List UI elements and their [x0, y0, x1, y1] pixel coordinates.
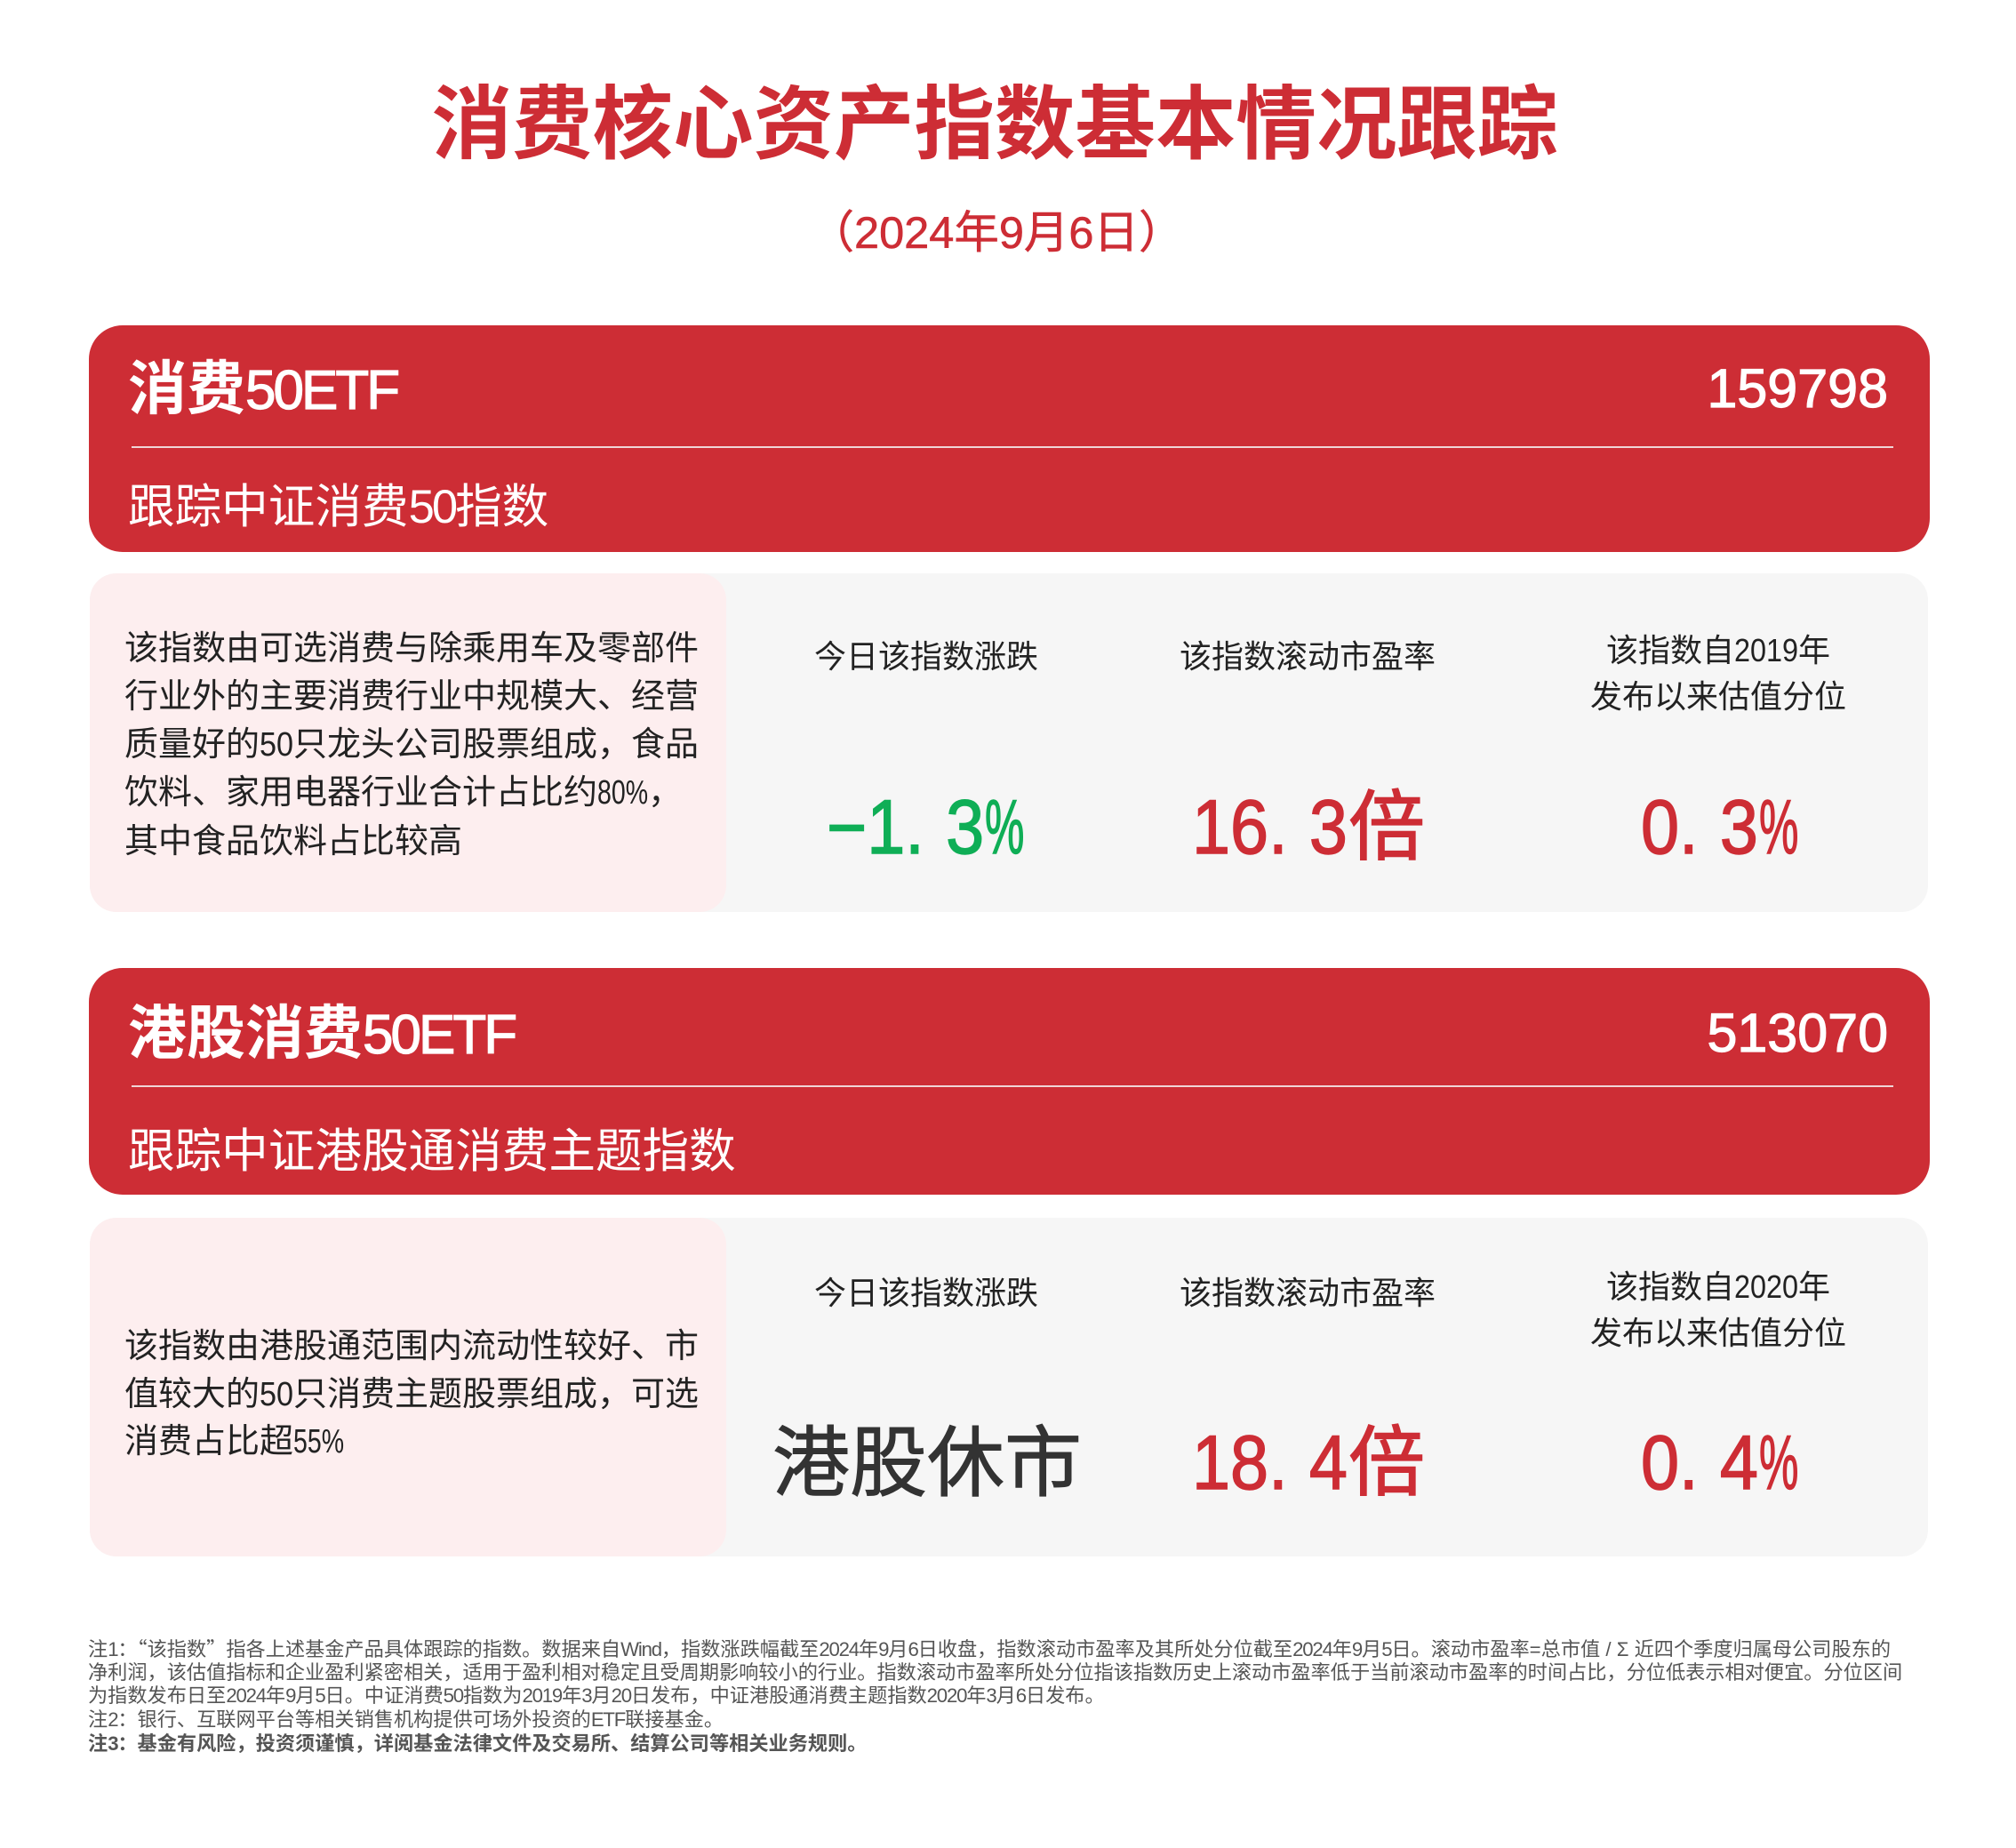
description text: 该指数由可选消费与除乘用车及零部件 — [124, 630, 699, 668]
tracked index: 跟踪中证港股通消费主题指数 — [128, 1125, 736, 1178]
stat label: rolling PE: 该指数滚动市盈率 — [1180, 638, 1436, 675]
stat value: rolling PE: 16.3 — [1192, 785, 1348, 870]
footnotes: 注2：银行、互联网平台等相关销售机构提供可场外投资的ETF联接基金。 — [88, 1708, 724, 1731]
footnotes: 净利润，该估值指标和企业盈利紧密相关，适用于盈利相对稳定且受周期影响较小的行业。指数滚动市盈率所处分位指该指数历史上滚动市盈率低于当前滚动市盈率的时间占比，分位低表示相对便宜。分位区间 — [88, 1661, 1902, 1684]
panel: 港股消费50ETF description: 消费占比超 — [124, 1423, 293, 1460]
panel: 消费50ETF description: 质量好的 只龙头公司股票组成，食品 — [124, 726, 699, 764]
stat label: percentile: 发布以来估值分位 — [1590, 1315, 1846, 1351]
footnotes: 为指数发布日至2024年9月5日。中证消费50指数为2019年3月20日发布，中证港股通消费主题指数2020年3月6日发布。 — [88, 1684, 1105, 1707]
stat label: percentile: 该指数自 年 — [1606, 1268, 1830, 1305]
stat value: market closed: 港股休市 — [772, 1420, 1082, 1507]
panel: 消费50ETF header — [89, 325, 1930, 552]
fund name: 港股消费50ETF — [128, 1000, 515, 1066]
stat value: rolling PE: 18.4 — [1192, 1420, 1348, 1506]
panel: 港股消费50ETF description: 值较大的 只消费主题股票组成，可选 — [124, 1376, 699, 1413]
stat label: rolling PE: 该指数滚动市盈率 — [1180, 1275, 1436, 1311]
panel: 消费50ETF description: 饮料、家用电器行业合计占比约 ， — [124, 774, 682, 812]
panel: 消费50ETF data — [90, 573, 1928, 912]
stat label: percentile: 发布以来估值分位 — [1590, 678, 1846, 715]
stat label: percentile: 2020 — [1734, 1268, 1798, 1305]
panel: 消费50ETF description — [90, 573, 726, 912]
stat label: daily change: 今日该指数涨跌 — [814, 638, 1038, 675]
stat value: rolling PE: 倍 — [1348, 1420, 1425, 1506]
stat value: daily change: % — [985, 785, 1024, 870]
footnotes: 注3：基金有风险，投资须谨慎，详阅基金法律文件及交易所、结算公司等相关业务规则。 — [88, 1732, 867, 1755]
stat label: percentile — [1590, 632, 1846, 715]
panel: 消费50ETF description: 80% — [597, 774, 648, 812]
stat label: daily change: 今日该指数涨跌 — [814, 1275, 1038, 1311]
date subtitle: （2024年9月6日） — [809, 207, 1184, 258]
panel: 消费50ETF description: 50 — [260, 726, 293, 764]
panel: 消费50ETF description: 其中食品饮料占比较高 — [124, 823, 462, 860]
stat value: percentile: 0.3 — [1641, 785, 1758, 870]
stat value: daily change: −1.3 — [827, 785, 984, 870]
panel: 港股消费50ETF description — [90, 1218, 726, 1556]
stat value: rolling PE: 倍 — [1348, 785, 1425, 870]
stat value: percentile: % — [1759, 785, 1798, 870]
panel: 港股消费50ETF description: 50 — [260, 1376, 293, 1413]
fund name: 消费50ETF — [128, 356, 397, 421]
footnotes — [88, 1634, 1902, 1755]
stat value: rolling PE — [1192, 785, 1425, 870]
stat value: rolling PE — [1192, 1420, 1425, 1506]
fund code: 513070 — [1707, 1003, 1888, 1063]
panel: 港股消费50ETF data — [90, 1218, 1928, 1556]
title: 消费核心资产指数基本情况跟踪 — [431, 80, 1557, 170]
description text: 该指数由港股通范围内流动性较好、市 — [124, 1328, 699, 1365]
stat label: percentile: 2019 — [1734, 632, 1798, 668]
footnotes: 注1：“该指数”指各上述基金产品具体跟踪的指数。数据来自Wind，指数涨跌幅截至2024年9月6日收盘，指数滚动市盈率及其所处分位截至2024年9月5日。滚动市盈率=总市值 / Σ 近四个季度归属母公司股东的 — [88, 1634, 1891, 1662]
stat label: percentile: 该指数自 年 — [1606, 632, 1830, 668]
panel: 港股消费50ETF header — [89, 968, 1930, 1195]
stat label: percentile — [1590, 1268, 1846, 1351]
tracked index: 跟踪中证消费50指数 — [128, 481, 548, 533]
fund code: 159798 — [1707, 358, 1888, 419]
stat value: percentile: % — [1759, 1420, 1798, 1506]
stat value: percentile: 0.4 — [1641, 1420, 1758, 1506]
panel: 消费50ETF description: 行业外的主要消费行业中规模大、经营 — [124, 678, 699, 716]
panel: 港股消费50ETF description: 55% — [293, 1423, 344, 1460]
